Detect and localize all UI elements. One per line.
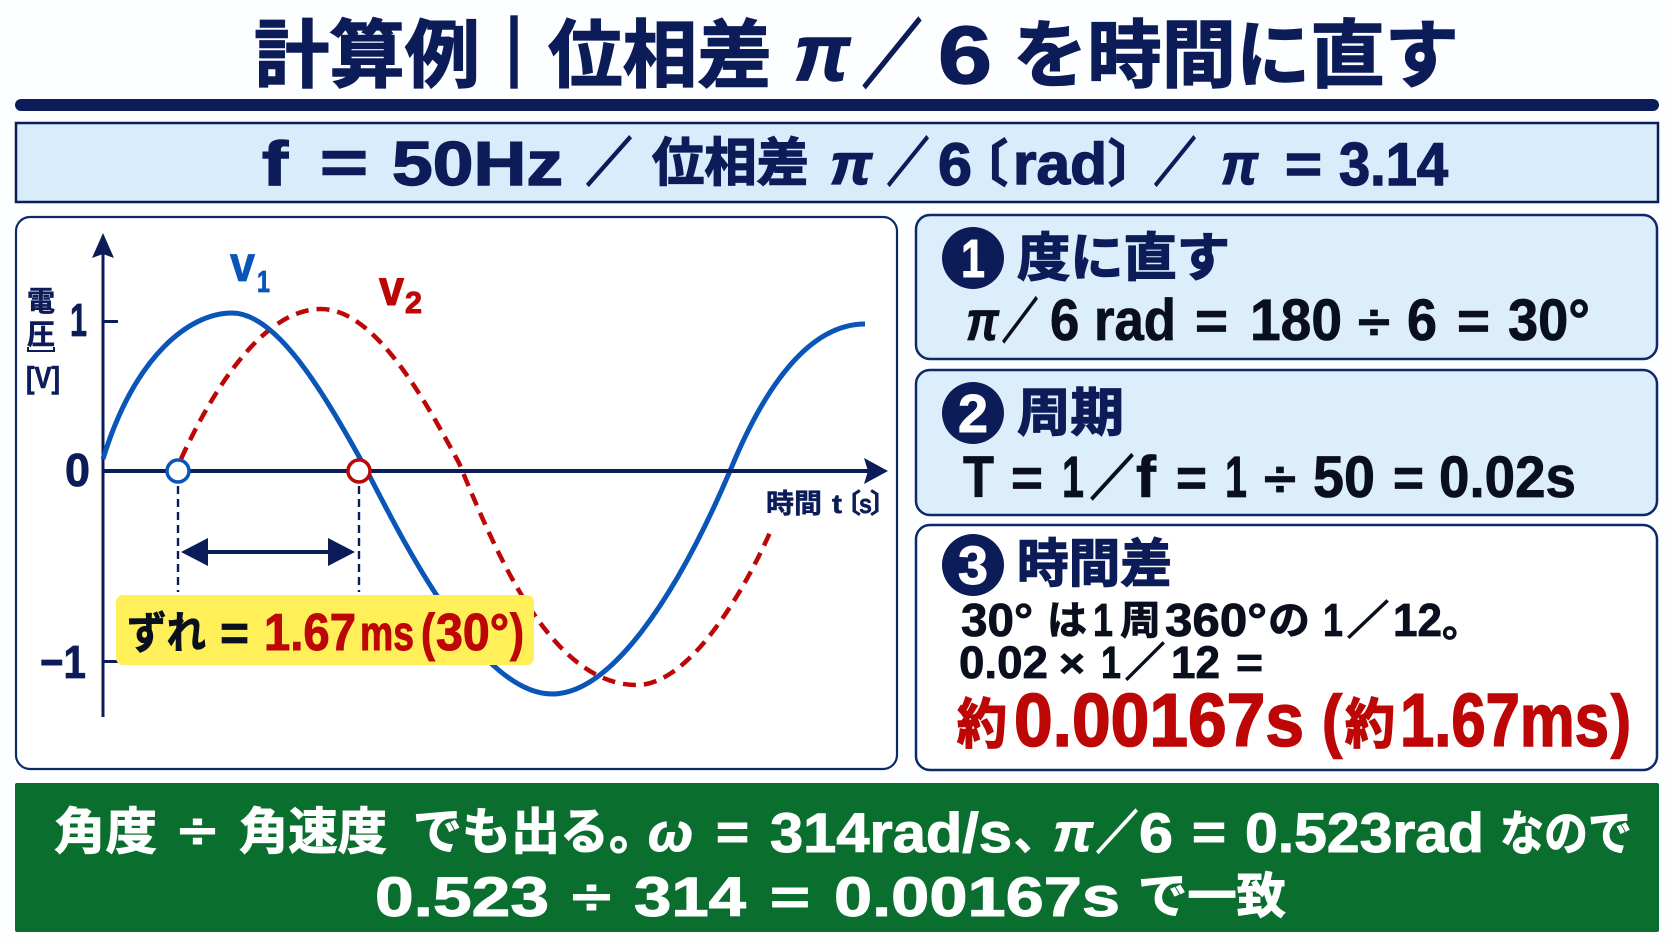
conclusion line 1 xyxy=(54,801,1632,864)
calculation line 2: 1 xyxy=(1101,637,1121,688)
formula 2: T xyxy=(963,445,994,510)
badge 1 xyxy=(942,227,1004,289)
calculation line 1 xyxy=(961,594,1482,646)
panel: conclusion banner xyxy=(15,783,1659,932)
x axis label xyxy=(766,489,897,519)
conclusion line 2: = xyxy=(770,869,810,925)
title xyxy=(254,8,1459,101)
calculation line 1: 360° xyxy=(1165,594,1267,646)
badge 3 xyxy=(942,534,1004,596)
conclusion line 2 xyxy=(375,865,1286,928)
y axis values xyxy=(40,294,90,688)
x axis label: t xyxy=(832,489,842,519)
conclusion line 2: で一致 xyxy=(1138,870,1286,924)
title: 6 xyxy=(938,10,992,101)
conclusion line 1: 、 xyxy=(1014,810,1058,859)
calculation line 2 xyxy=(959,637,1263,688)
title: を時間に直す xyxy=(1013,14,1459,97)
conclusion line 2: 0.00167s xyxy=(834,865,1120,928)
given values banner: π xyxy=(1221,132,1259,197)
calculation line 1: 12 xyxy=(1393,594,1442,646)
result xyxy=(957,678,1631,762)
guide lines xyxy=(178,486,359,592)
calculation line 1: 。 xyxy=(1442,601,1482,645)
label v2 xyxy=(379,260,422,320)
curve v1 xyxy=(103,313,865,694)
result: 0.00167s xyxy=(1014,678,1304,762)
panel: phase difference graph xyxy=(16,217,897,769)
callout: shift: ) xyxy=(510,604,524,662)
label v1 xyxy=(230,236,270,299)
y axis values: 1 xyxy=(70,294,87,346)
callout: shift: ずれ xyxy=(127,609,206,658)
formula 1: 30° xyxy=(1508,288,1590,353)
x axis label: s xyxy=(859,489,872,519)
formula 2: 50 xyxy=(1313,445,1375,510)
formula 2: 1 xyxy=(1225,445,1247,510)
conclusion line 1: ÷ xyxy=(179,803,216,859)
given values banner: 3.14 xyxy=(1339,131,1449,198)
conclusion line 1: 6 xyxy=(1139,801,1173,864)
x axis label: 〕 xyxy=(870,489,897,519)
callout: shift: ( xyxy=(421,604,436,662)
y axis values: 0 xyxy=(65,444,90,496)
zero crossing marker v2 xyxy=(348,460,370,482)
calculation line 1: 1 xyxy=(1323,594,1343,646)
badge 1: 1 xyxy=(961,229,985,289)
given values banner: ／ xyxy=(1154,135,1196,193)
result: 1.67ms xyxy=(1400,678,1609,762)
callout: shift: = xyxy=(220,605,249,661)
formula 2: 0.02s xyxy=(1439,445,1576,510)
title: π xyxy=(794,8,851,97)
formula 2 xyxy=(963,445,1576,510)
result: ) xyxy=(1611,681,1631,759)
title: 位相差 xyxy=(548,14,772,97)
formula 2: = xyxy=(1393,448,1424,508)
conclusion line 2: 0.523 xyxy=(375,865,549,928)
given values banner: 6 xyxy=(938,131,972,198)
given values banner: 〔 xyxy=(958,136,1008,192)
panel: step 3 xyxy=(916,525,1657,770)
given values banner: 位相差 xyxy=(652,135,809,193)
formula 1: = xyxy=(1457,291,1490,351)
y axis label: [V] xyxy=(26,360,60,395)
conclusion line 1: なので xyxy=(1500,808,1632,861)
label v1: 1 xyxy=(257,264,270,299)
formula 1: 180 xyxy=(1250,288,1342,353)
conclusion line 2: 314 xyxy=(634,865,746,928)
calculation line 2: ／ xyxy=(1125,641,1165,685)
curve v2 dashed xyxy=(181,309,772,685)
formula 2: ÷ xyxy=(1264,451,1296,507)
label v1: v xyxy=(230,236,255,292)
formula 1: 6 xyxy=(1407,288,1437,353)
badge 2 xyxy=(942,382,1004,444)
formula 2: 1 xyxy=(1062,445,1084,510)
given values banner: π xyxy=(830,132,873,197)
given values banner: 〕 xyxy=(1108,136,1158,192)
callout: shift: ms xyxy=(360,607,414,661)
given values banner: ／ xyxy=(586,135,632,193)
calculation line 1: 周 xyxy=(1120,599,1161,643)
conclusion line 1: でも出る。 xyxy=(413,804,658,860)
conclusion line 1: ／ xyxy=(1096,807,1138,859)
conclusion line 1: 0.523rad xyxy=(1245,801,1484,864)
conclusion line 1: ω xyxy=(648,803,693,863)
y axis label: 電 xyxy=(27,286,55,317)
y axis with arrow and ticks xyxy=(92,233,118,717)
given values banner xyxy=(16,123,1658,202)
formula 1: π xyxy=(966,289,1000,352)
given values banner: ／ xyxy=(887,135,929,193)
calculation line 2: × xyxy=(1059,642,1085,686)
formula 1: 6 rad xyxy=(1050,288,1176,353)
formula 1: ／ xyxy=(1002,296,1038,349)
y axis values: −1 xyxy=(40,636,86,688)
double arrow xyxy=(181,538,355,566)
result: ( xyxy=(1322,681,1343,759)
result: 約 xyxy=(957,695,1007,755)
title: ／ xyxy=(862,14,922,97)
badge 2: 2 xyxy=(958,384,988,444)
callout: shift xyxy=(116,595,534,665)
conclusion line 1: 314rad/s xyxy=(770,801,1012,864)
conclusion line 2: ÷ xyxy=(572,869,611,925)
calculation line 1: 30° xyxy=(961,594,1033,646)
x axis with arrow xyxy=(103,458,888,484)
given values banner: 50Hz xyxy=(392,130,563,199)
result: 約 xyxy=(1345,695,1395,755)
heading 3: 時間差 xyxy=(1017,536,1172,594)
calculation line 2: 0.02 xyxy=(959,637,1048,688)
given values banner: rad xyxy=(1013,132,1107,197)
x axis label: 時間 xyxy=(766,489,822,519)
given values banner: f xyxy=(262,130,288,199)
badge 3: 3 xyxy=(958,536,988,596)
heading 1: 度に直す xyxy=(1017,230,1230,288)
heading 2: 周期 xyxy=(1017,385,1124,443)
label v2: 2 xyxy=(405,285,422,320)
callout: shift: 30° xyxy=(436,604,509,662)
panel: step 1 xyxy=(916,215,1657,359)
given values banner: = xyxy=(320,129,368,196)
calculation line 1: ／ xyxy=(1347,599,1389,643)
x axis label: 〔 xyxy=(834,489,861,519)
conclusion line 1: π xyxy=(1053,803,1094,863)
y axis label xyxy=(26,286,60,395)
panel: step 2 xyxy=(916,370,1657,515)
formula 1: = xyxy=(1195,291,1228,351)
calculation line 2: 12 xyxy=(1171,637,1220,688)
y axis label: 圧 xyxy=(27,319,55,350)
conclusion line 1: = xyxy=(716,804,749,860)
conclusion line 1: 角速度 xyxy=(239,804,387,860)
calculation line 1: の xyxy=(1268,599,1310,643)
formula 2: = xyxy=(1176,448,1207,508)
calculation line 1: 1 xyxy=(1093,594,1113,646)
zero crossing marker v1 xyxy=(167,460,189,482)
conclusion line 1: = xyxy=(1192,804,1226,860)
label v2: v xyxy=(379,260,404,316)
calculation line 2: = xyxy=(1236,639,1263,686)
formula 2: f xyxy=(1136,445,1157,510)
formula 1: ÷ xyxy=(1358,294,1390,350)
callout: shift: 1.67 xyxy=(264,604,356,662)
title: 計算例 xyxy=(254,14,480,97)
calculation line 1: は xyxy=(1047,599,1087,643)
given values banner: = xyxy=(1285,132,1322,195)
formula 2: = xyxy=(1011,448,1043,508)
formula 1 xyxy=(966,288,1590,353)
formula 2: ／ xyxy=(1090,453,1134,506)
conclusion line 1: 角度 xyxy=(54,804,157,860)
